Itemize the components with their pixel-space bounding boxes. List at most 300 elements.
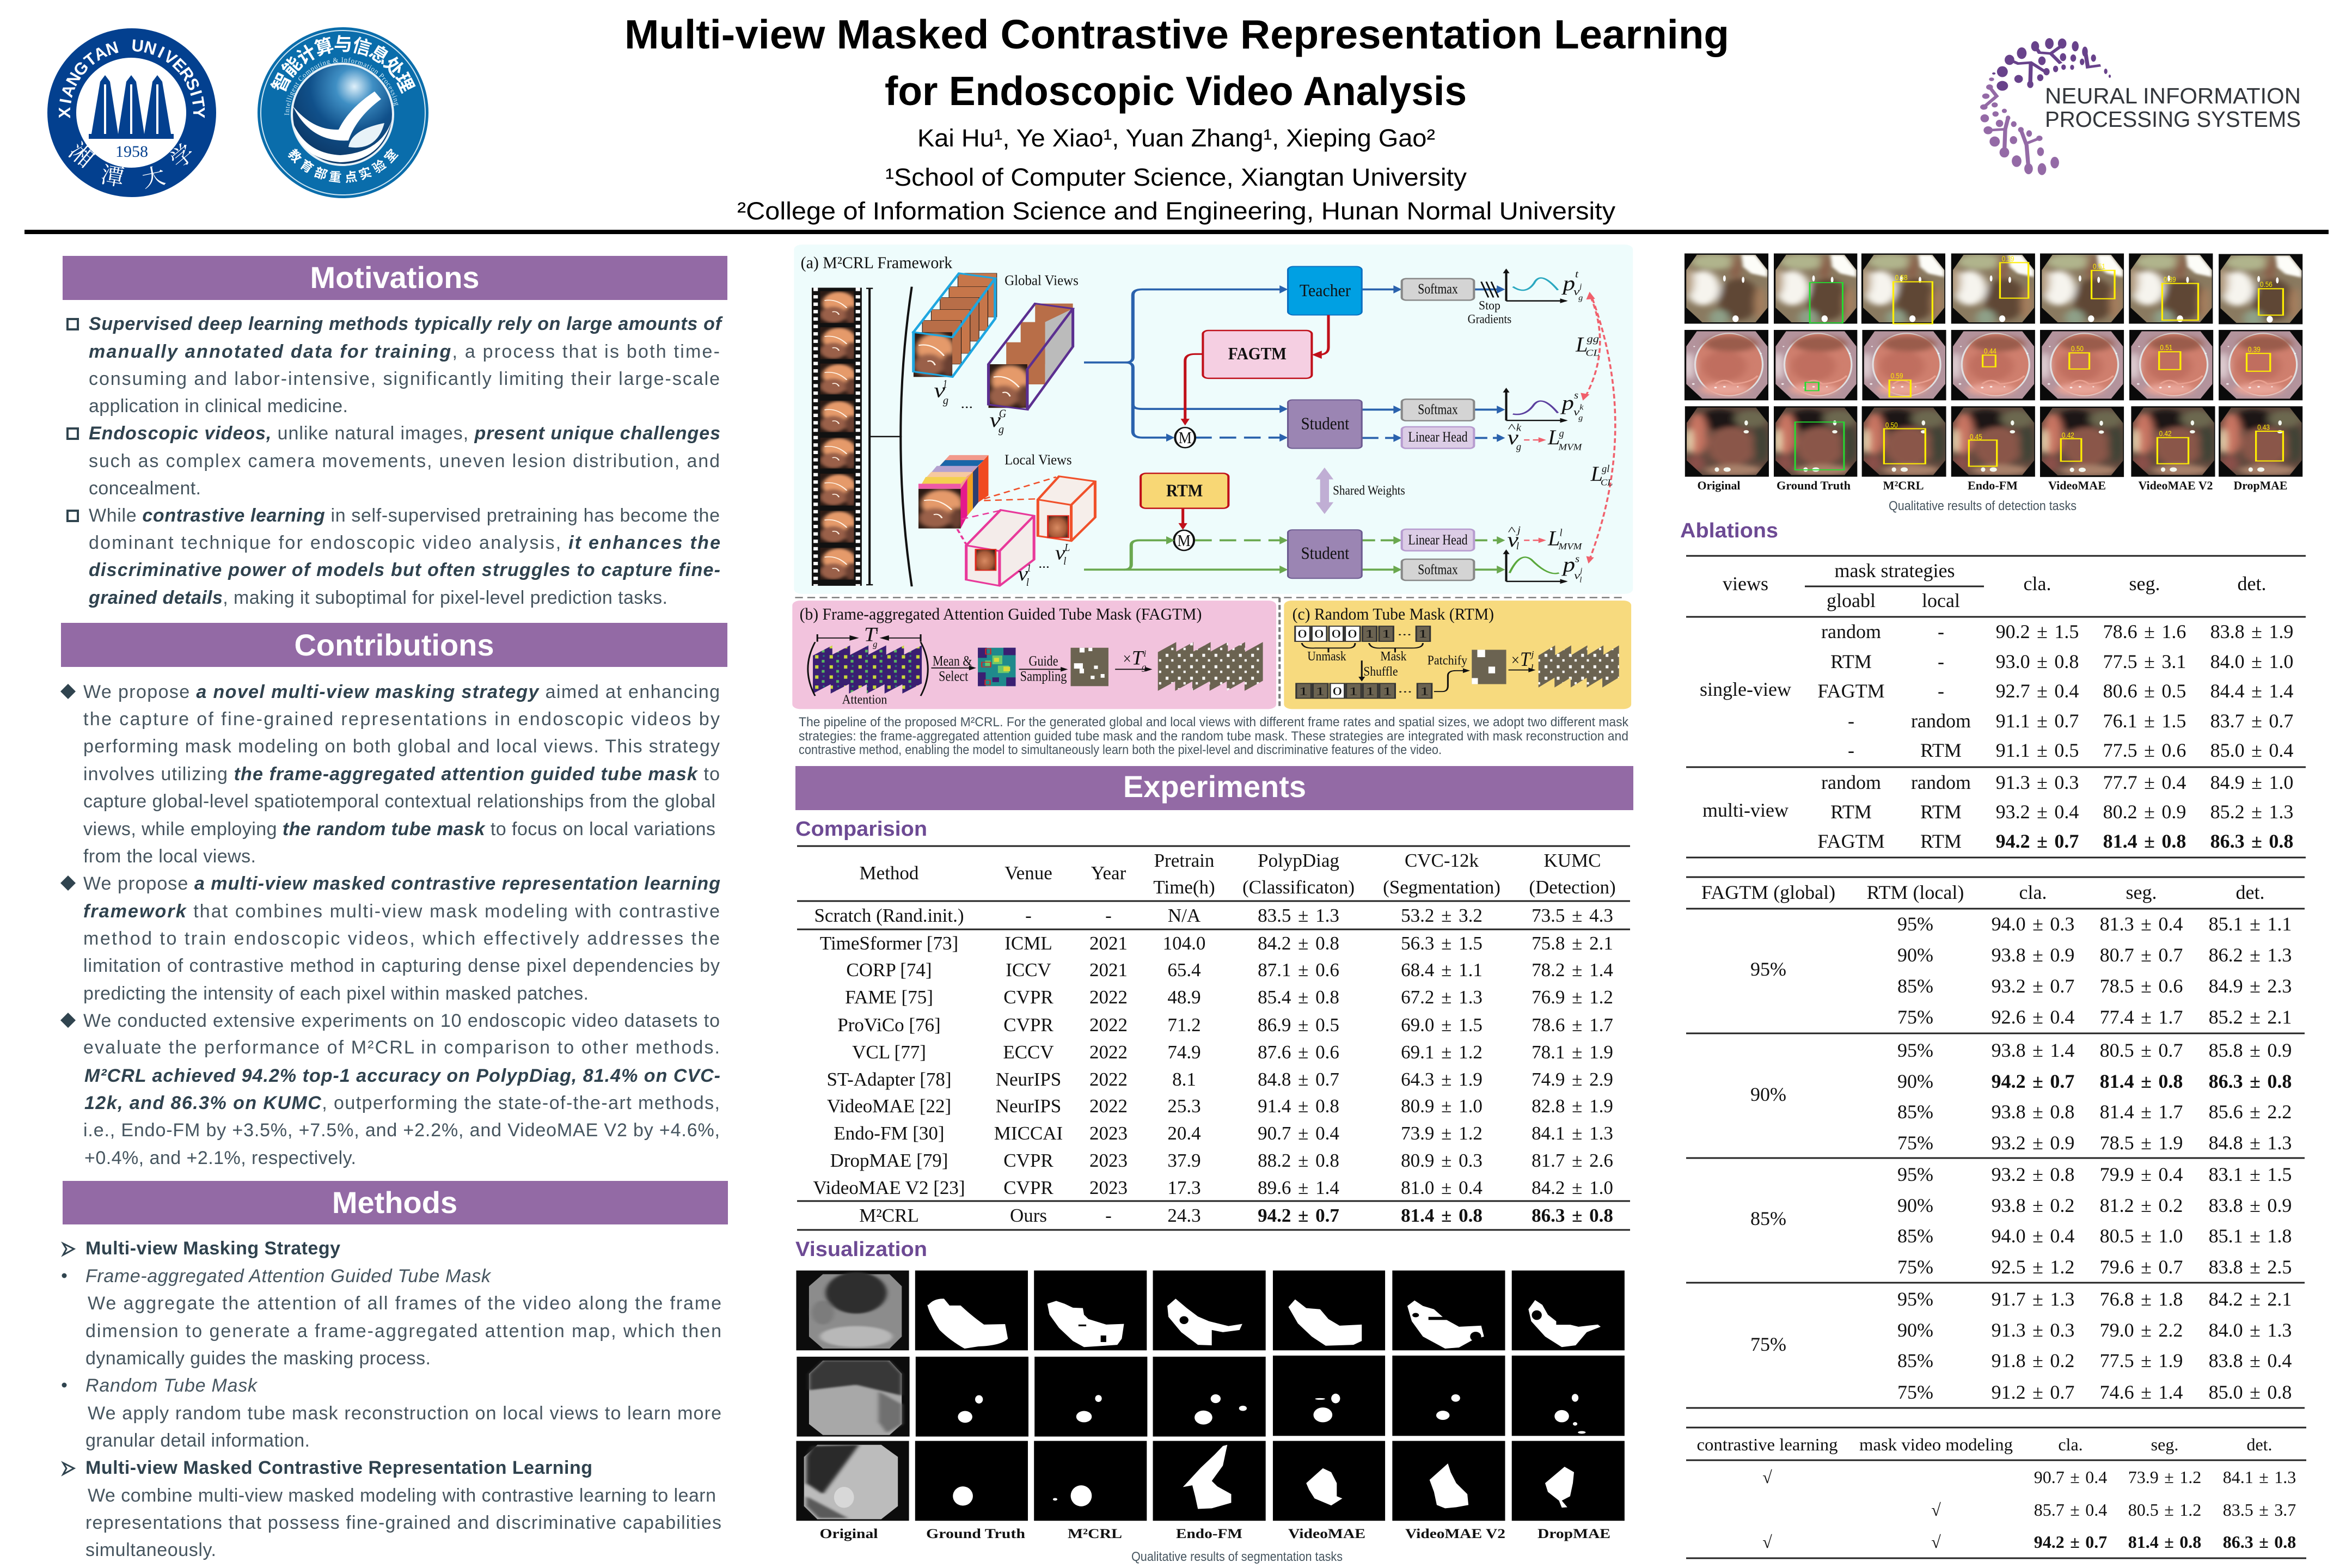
linear head: local student <box>1402 529 1474 551</box>
contributions text: capture global-level spatiotemporal contextual relationships from the global <box>83 791 715 812</box>
methods text: dynamically guides the masking process. <box>85 1348 431 1369</box>
table 1 header: views <box>1723 573 1768 595</box>
shuffled token row: 1 <box>1349 685 1358 697</box>
shuffled token row <box>1296 683 1432 699</box>
local reconstruction loss: j <box>1516 524 1521 536</box>
guide sampling step: Sampling <box>1020 668 1067 684</box>
local reconstruction loss: L <box>1547 526 1560 550</box>
table 2 rows: 84.9 ± 2.3 <box>2209 975 2292 997</box>
logo: key laboratory: 重 <box>328 166 342 186</box>
table 2 rows: 79.6 ± 0.7 <box>2100 1256 2183 1278</box>
table 1 rows: 91.1 ± 0.7 <box>1996 710 2079 732</box>
global views labels: g <box>999 423 1004 436</box>
logo: key laboratory: 验 <box>368 154 389 177</box>
comparison table rows: 65.4 <box>1167 959 1201 981</box>
table 3 rows: 86.3 ± 0.8 <box>2223 1532 2296 1552</box>
softmax block: local student: Softmax <box>1418 561 1458 577</box>
global student output plot: v <box>1573 407 1580 418</box>
predicted boxes <box>1884 262 2283 466</box>
white lesion masks row 1 <box>927 1298 1601 1349</box>
table 1 rows: multi-view <box>1702 799 1788 821</box>
comparison table rows: 2022 <box>1089 1095 1128 1117</box>
logo: key laboratory: 智 <box>264 68 296 96</box>
comparison table rows: ICCV <box>1006 959 1051 981</box>
table 3 rows: 85.7 ± 0.4 <box>2034 1500 2107 1520</box>
comparison table rows: N/A <box>1168 905 1201 926</box>
shuffled token row: 1 <box>1365 685 1375 697</box>
global reconstruction loss: g <box>1516 441 1521 452</box>
comparison table rows: 2023 <box>1089 1123 1128 1144</box>
table 1 rows: 93.0 ± 0.8 <box>1996 651 2079 672</box>
logo: Xiangtan University: E <box>169 54 190 76</box>
contributions text: evaluate the performance of M²CRL in comparison to other methods. <box>83 1037 720 1058</box>
panel: M2CRL framework diagram <box>792 244 1633 709</box>
logo: Xiangtan University: I <box>186 88 206 98</box>
logo: Xiangtan University: I <box>155 42 168 62</box>
heading: Experiments <box>795 766 1633 810</box>
unshuffled token row: 1 <box>1418 628 1428 640</box>
table 2 rows: 85.1 ± 1.1 <box>2209 913 2292 935</box>
teacher output plot: v <box>1573 286 1580 297</box>
table 2 rows: 94.2 ± 0.7 <box>1992 1070 2074 1092</box>
logo: key laboratory: 室 <box>379 144 401 166</box>
global views labels: G <box>999 407 1006 420</box>
table 2 rows: 79.9 ± 0.4 <box>2100 1163 2183 1185</box>
attention frames: g <box>873 639 878 650</box>
subheading: Ablations: Ablations <box>1680 519 1778 542</box>
endoscopy images row 3 <box>1685 406 2302 477</box>
global views labels: Global Views <box>1004 272 1079 288</box>
table 1 rows: random <box>1911 771 1971 793</box>
confidence scores: 0.59 <box>1891 372 1903 381</box>
table 3 rows: √ <box>1931 1532 1941 1552</box>
table 2 rows: 77.5 ± 1.9 <box>2100 1350 2183 1371</box>
table 3 rows: √ <box>1762 1467 1772 1487</box>
figure caption: contrastive method, enabling the model to simultaneously learn both the pixel-level and discriminative features of the video. <box>799 743 1442 757</box>
contributions text: framework that combines multi-view mask modeling with contrastive <box>83 901 720 922</box>
teacher block <box>1288 266 1362 315</box>
table 2 rows: 92.6 ± 0.4 <box>1992 1006 2074 1028</box>
table 1 rows: FAGTM <box>1817 680 1885 702</box>
global views labels: ... <box>960 396 973 411</box>
logo: key laboratory: 与 <box>334 29 352 56</box>
confidence scores: 0.39 <box>2164 275 2176 284</box>
logo: Xiangtan University: S <box>182 75 204 94</box>
table 3 header: det. <box>2246 1435 2273 1454</box>
table 3 rows: 80.5 ± 1.2 <box>2128 1500 2201 1520</box>
comparison table rows: 84.8 ± 0.7 <box>1258 1069 1339 1090</box>
table 2 rows: 86.3 ± 0.8 <box>2209 1070 2292 1092</box>
segmentation results grid <box>796 1271 1625 1521</box>
shuffled token row: 1 <box>1298 685 1308 697</box>
motivations text: While contrastive learning in self-supervised pretraining has become the <box>89 505 720 526</box>
table: contrastive learning and mask video modeling <box>1686 1428 2306 1558</box>
table 1 rows: - <box>1938 621 1944 642</box>
contributions text: 12k, and 86.3% on KUMC, outperforming the state-of-the-art methods, <box>84 1093 720 1113</box>
temporal repeat arrow local: j <box>1530 649 1534 659</box>
temporal repeat arrow local: T <box>1520 648 1532 670</box>
comparison table rows: 81.7 ± 2.6 <box>1532 1150 1613 1171</box>
green arrowheads <box>1166 536 1505 574</box>
panel: RTM <box>1284 601 1631 709</box>
table 2 rows: 81.4 ± 0.8 <box>2100 1070 2183 1092</box>
global student output plot: k <box>1579 403 1584 412</box>
contributions text: the capture of fine-grained representations in endoscopic videos by <box>83 709 720 730</box>
detection column labels <box>1698 479 2288 492</box>
global reconstruction loss: g <box>1559 428 1564 439</box>
RTM block: RTM <box>1166 481 1203 500</box>
comparison table header: (Classificaton) <box>1242 877 1355 898</box>
table 2 rows: 93.2 ± 0.9 <box>1992 1132 2074 1154</box>
table 2 rows: 75% <box>1750 1333 1786 1355</box>
table: mask ratio <box>1686 877 2305 1408</box>
temporal repeat arrow: T <box>1132 647 1144 669</box>
table 1 rows: 85.2 ± 1.3 <box>2210 801 2293 823</box>
motivations text <box>88 314 724 608</box>
attention frames: i <box>875 626 878 636</box>
table 1 rows: 91.1 ± 0.5 <box>1996 739 2079 761</box>
motivations text: discriminative power of models but often struggles to capture fine- <box>89 560 720 580</box>
methods text: We apply random tube mask reconstruction on local views to learn more <box>88 1403 721 1424</box>
comparison table header: KUMC <box>1543 850 1601 871</box>
table 2 header: RTM (local) <box>1867 881 1964 903</box>
table 2 rows: 91.3 ± 0.3 <box>1992 1319 2074 1341</box>
comparison table rows: NeurIPS <box>996 1095 1061 1117</box>
comparison table header: Time(h) <box>1153 877 1215 898</box>
logo: key laboratory <box>258 27 428 198</box>
table 2 rows: 80.5 ± 0.7 <box>2100 1039 2183 1061</box>
table 2 rows: 81.2 ± 0.2 <box>2100 1195 2183 1216</box>
shuffle arrow: Shuffle <box>1363 664 1398 679</box>
figure caption <box>799 715 1629 757</box>
contrastive loss labels: gl <box>1602 463 1609 474</box>
black mask tiles <box>915 1271 1625 1521</box>
table 1 rows <box>1700 621 2293 852</box>
teacher output plot: j <box>1578 282 1582 291</box>
global reconstruction loss: MVM <box>1558 442 1582 452</box>
comparison table rows: 73.5 ± 4.3 <box>1532 905 1613 926</box>
table 2 rows: 91.7 ± 1.3 <box>1992 1288 2074 1310</box>
table 2 rows: 84.8 ± 1.3 <box>2209 1132 2292 1154</box>
ground truth boxes <box>1795 283 1844 470</box>
comparison table rows: 85.4 ± 0.8 <box>1258 987 1339 1008</box>
comparison table rows: 84.2 ± 0.8 <box>1258 933 1339 954</box>
segmentation column labels: VideoMAE V2 <box>1405 1527 1505 1541</box>
local views labels: ... <box>1038 556 1050 571</box>
motivations text: manually annotated data for training, a process that is both time- <box>89 341 720 362</box>
logo: key laboratory: 信 <box>350 30 375 61</box>
comparison table rows: DropMAE [79] <box>830 1150 948 1171</box>
table 1 header <box>1723 560 2266 611</box>
table 2 rows: 84.0 ± 1.3 <box>2209 1319 2292 1341</box>
comparison table rows: 2022 <box>1089 1069 1128 1090</box>
table 2 header: FAGTM (global) <box>1701 881 1835 903</box>
logo: Xiangtan University: X <box>55 107 74 118</box>
detection column labels: Original <box>1698 479 1740 492</box>
comparison table rows: 80.9 ± 1.0 <box>1401 1095 1483 1117</box>
table 1 rows: 85.0 ± 0.4 <box>2210 739 2293 761</box>
motivations text: dominant technique for endoscopic video analysis, it enhances the <box>89 532 720 553</box>
comparison table rows: 90.7 ± 0.4 <box>1258 1123 1339 1144</box>
table 2 rows: 84.2 ± 2.1 <box>2209 1288 2292 1310</box>
methods text: Multi-view Masking Strategy <box>85 1238 340 1259</box>
table 1 rows: 86.3 ± 0.8 <box>2210 830 2293 852</box>
video film strip <box>812 287 912 586</box>
contrastive loss labels: CL <box>1585 348 1600 358</box>
methods text: simultaneously. <box>85 1540 216 1560</box>
table 2 rows: 95% <box>1897 1288 1933 1310</box>
aggregated attention heatmap <box>978 648 1016 686</box>
comparison table rows: Ours <box>1010 1205 1047 1226</box>
table 1 rows: random <box>1821 621 1881 642</box>
table 2 rows: 95% <box>1897 1163 1933 1185</box>
logo: key laboratory: 处 <box>379 50 411 82</box>
comparison table rows: 2022 <box>1089 1014 1128 1036</box>
local views labels <box>1004 452 1072 588</box>
softmax block: teacher: Softmax <box>1418 281 1458 297</box>
table 2 rows: 85% <box>1897 975 1933 997</box>
table 1 header: det. <box>2238 573 2266 595</box>
logo: Xiangtan University: I <box>56 97 75 105</box>
global view cuboids <box>914 273 1073 409</box>
table 3 rows: 73.9 ± 1.2 <box>2128 1467 2201 1487</box>
heading: Motivations <box>63 256 727 300</box>
comparison table rows: 53.2 ± 3.2 <box>1401 905 1483 926</box>
comparison table rows: 69.0 ± 1.5 <box>1401 1014 1483 1036</box>
comparison table rows: 74.9 ± 2.9 <box>1532 1069 1613 1090</box>
segmentation column labels: DropMAE <box>1538 1527 1610 1541</box>
FAGTM block <box>1203 330 1312 378</box>
local views labels: l <box>1063 555 1066 567</box>
student block: global <box>1288 400 1362 449</box>
contributions text: predicting the intensity of each pixel within masked patches. <box>83 983 589 1004</box>
logo: Xiangtan University: R <box>175 64 198 84</box>
comparison table rows: VideoMAE V2 [23] <box>813 1177 965 1198</box>
subheading: Visualization: Visualization <box>795 1238 927 1261</box>
table 2 rows: 85.0 ± 0.8 <box>2209 1381 2292 1403</box>
table 3 rows: 83.5 ± 3.7 <box>2223 1500 2296 1520</box>
local views labels: Local Views <box>1004 452 1072 468</box>
table 1 rows: 93.2 ± 0.4 <box>1996 801 2079 823</box>
local view stack <box>918 455 1056 544</box>
comparison table rows: 71.2 <box>1167 1014 1201 1036</box>
heading: Methods: Methods <box>332 1185 457 1220</box>
unshuffled token row: 0 <box>1347 628 1357 640</box>
table 3 rows: 94.2 ± 0.7 <box>2034 1532 2107 1552</box>
table 1 rows: - <box>1938 651 1944 672</box>
holes in masks <box>1079 1310 1570 1342</box>
comparison table header: Method <box>860 862 919 884</box>
local views labels: v <box>1055 542 1065 564</box>
logo: NeurIPS <box>1980 38 2301 175</box>
table 2 rows: 81.3 ± 0.4 <box>2100 913 2183 935</box>
table 3 rows: 90.7 ± 0.4 <box>2034 1467 2107 1487</box>
contrastive loss labels: L <box>1590 462 1603 486</box>
comparison table rows: 94.2 ± 0.7 <box>1258 1205 1339 1226</box>
table 1 rows: 80.2 ± 0.9 <box>2103 801 2186 823</box>
segmentation column labels: Ground Truth <box>926 1527 1025 1541</box>
masked local tube frames <box>1539 645 1619 688</box>
table 2 rows: 85% <box>1897 1225 1933 1247</box>
comparison table rows: CVPR <box>1003 1014 1054 1036</box>
table 2 rows: 77.4 ± 1.7 <box>2100 1006 2183 1028</box>
comparison table header: PolypDiag <box>1258 850 1339 871</box>
methods text: Frame-aggregated Attention Guided Tube Mask <box>85 1266 492 1287</box>
table 2 rows: 85.2 ± 2.1 <box>2209 1006 2292 1028</box>
global views labels: v <box>934 379 946 402</box>
table 2 rows: 94.0 ± 0.4 <box>1992 1225 2074 1247</box>
table 2 rows: 76.8 ± 1.8 <box>2100 1288 2183 1310</box>
table: method comparison <box>797 846 1630 1230</box>
table 2 rows: 93.8 ± 0.2 <box>1992 1195 2074 1216</box>
contributions text: views, while employing the random tube mask to focus on local variations <box>83 819 715 840</box>
comparison table rows: 75.8 ± 2.1 <box>1532 933 1613 954</box>
comparison table rows: 91.4 ± 0.8 <box>1258 1095 1339 1117</box>
comparison table rows: 74.9 <box>1167 1042 1201 1063</box>
table 2 rows: 85.1 ± 1.8 <box>2209 1225 2292 1247</box>
comparison table rows: 24.3 <box>1167 1205 1201 1226</box>
table 1 rows: 81.4 ± 0.8 <box>2103 830 2186 852</box>
local student output plot: p <box>1561 553 1575 576</box>
comparison table rows: 87.1 ± 0.6 <box>1258 959 1339 981</box>
heading: Methods <box>63 1181 728 1224</box>
comparison table rows: ST-Adapter [78] <box>826 1069 952 1090</box>
global student output plot: s <box>1574 390 1578 401</box>
table 3 header: cla. <box>2058 1435 2083 1454</box>
table 2 rows: 83.8 ± 0.4 <box>2209 1350 2292 1371</box>
table 1 rows: 84.4 ± 1.4 <box>2210 680 2293 702</box>
comparison table rows: 84.2 ± 1.0 <box>1532 1177 1613 1198</box>
table 1 rows: 84.9 ± 1.0 <box>2210 771 2293 793</box>
confidence scores: 0.42 <box>2159 430 2172 438</box>
logo: Xiangtan University: 湘 <box>63 134 101 174</box>
contributions text: We propose a novel multi-view masking strategy aimed at enhancing <box>83 682 720 702</box>
comparison table rows: 83.5 ± 1.3 <box>1258 905 1339 926</box>
logo: Xiangtan University: T <box>81 49 100 70</box>
logo: Xiangtan University: 1958 <box>115 143 148 161</box>
comparison table rows: VideoMAE [22] <box>827 1095 951 1117</box>
affiliations <box>737 163 1616 225</box>
title: Multi-view Masked Contrastive Representation Learning <box>624 11 1729 57</box>
heading: Motivations: Motivations <box>310 260 480 295</box>
contributions text: from the local views. <box>83 846 256 867</box>
blue arrowheads <box>1166 285 1505 442</box>
table 3 header <box>1696 1435 2273 1454</box>
comparison table rows: 68.4 ± 1.1 <box>1401 959 1483 981</box>
temporal repeat arrow local: × <box>1511 651 1520 669</box>
framework background <box>794 244 1633 594</box>
table 2 rows: 90% <box>1897 1319 1933 1341</box>
comparison table header <box>860 850 1616 898</box>
unmask and mask braces: Mask <box>1380 649 1406 664</box>
affiliations: ²College of Information Science and Engineering, Hunan Normal University <box>737 197 1616 225</box>
contrastive loss arrows <box>1585 297 1615 560</box>
unshuffled token row: 1 <box>1365 628 1374 640</box>
shuffled token row: 1 <box>1315 685 1325 697</box>
linear head: local student: Linear Head <box>1408 531 1468 548</box>
logo: Xiangtan University: Y <box>189 107 209 119</box>
motivations text: concealment. <box>89 478 201 499</box>
comparison table rows: 82.8 ± 1.9 <box>1532 1095 1613 1117</box>
table 2 rows: 79.0 ± 2.2 <box>2100 1319 2183 1341</box>
logo: Xiangtan University: 学 <box>162 135 200 175</box>
detection column labels: VideoMAE <box>2048 479 2106 492</box>
table 2 rows: 90% <box>1750 1083 1786 1105</box>
logo: key laboratory: Intelligent Computing & Information Processing <box>284 58 399 115</box>
panel: motivations <box>63 256 727 608</box>
stop gradients: Gradients <box>1468 311 1511 326</box>
shuffled token row: 1 <box>1420 685 1429 697</box>
linear head: global student: Linear Head <box>1408 429 1468 445</box>
table 1 rows: 91.3 ± 0.3 <box>1996 771 2079 793</box>
contributions text: We conducted extensive experiments on 10 endoscopic video datasets to <box>83 1010 720 1031</box>
local views labels: v <box>1018 562 1028 585</box>
heading: Contributions <box>61 623 727 667</box>
contributions text <box>83 682 720 1168</box>
comparison table rows: 81.0 ± 0.4 <box>1401 1177 1483 1198</box>
teacher output plot <box>1503 268 1583 303</box>
softmax block: teacher <box>1402 279 1474 300</box>
confidence scores: 0.44 <box>1984 347 1996 356</box>
contrastive loss labels: L <box>1575 332 1588 356</box>
comparison table rows: 73.9 ± 1.2 <box>1401 1123 1483 1144</box>
panel: FAGTM <box>792 601 1276 709</box>
temporal repeat arrow: × <box>1123 650 1131 667</box>
teacher block: Teacher <box>1300 281 1351 300</box>
unshuffled token row <box>1295 626 1430 641</box>
comparison table rows: 86.9 ± 0.5 <box>1258 1014 1339 1036</box>
comparison table header: Venue <box>1004 862 1052 884</box>
local reconstruction loss: MVM <box>1558 541 1582 552</box>
attention frames <box>808 623 928 707</box>
methods text: We combine multi-view masked modeling with contrastive learning to learn <box>88 1485 716 1506</box>
FAGTM block: FAGTM <box>1228 344 1287 364</box>
comparison table rows: 78.1 ± 1.9 <box>1532 1042 1613 1063</box>
shuffled token row: 0 <box>1333 685 1342 697</box>
confidence scores: 0.58 <box>1895 273 1908 282</box>
comparison table rows: 2022 <box>1089 1042 1128 1063</box>
table 3 header: contrastive learning <box>1696 1435 1838 1454</box>
comparison table rows: 8.1 <box>1172 1069 1196 1090</box>
table 1 header: local <box>1922 590 1960 611</box>
contrastive loss labels: CL <box>1601 477 1613 488</box>
contributions text: i.e., Endo-FM by +3.5%, +7.5%, and +2.2%, and VideoMAE V2 by +4.6%, <box>83 1120 720 1141</box>
confidence scores: 0.43 <box>2257 423 2270 432</box>
title <box>624 11 1729 114</box>
logo: NeurIPS: NEURAL INFORMATION <box>2045 83 2301 108</box>
contributions text: limitation of contrastive method in capturing dense pixel dependencies by <box>83 955 720 976</box>
segmentation caption: Qualitative results of segmentation tasks <box>1131 1549 1343 1564</box>
local views labels: L <box>1064 542 1070 554</box>
patchify arrow <box>1428 653 1470 691</box>
blue global flow arrows <box>1084 290 1498 438</box>
detection column labels: M²CRL <box>1883 479 1924 492</box>
contrastive loss labels: gg <box>1587 334 1599 345</box>
table 2 rows: 75% <box>1897 1256 1933 1278</box>
confidence scores <box>1885 255 2273 442</box>
FAGTM title: (b) Frame-aggregated Attention Guided Tube Mask (FAGTM) <box>800 605 1202 623</box>
motivations text: application in clinical medicine. <box>89 396 348 416</box>
table 2 rows: 93.2 ± 0.8 <box>1992 1163 2074 1185</box>
sampled mask <box>1071 648 1108 686</box>
table 1 rows: 92.7 ± 0.4 <box>1996 680 2079 702</box>
table 2 rows: 90% <box>1897 944 1933 966</box>
white lesion masks row 3 <box>953 1445 1574 1509</box>
local student output plot: s <box>1575 553 1579 565</box>
table 2 rows: 85% <box>1750 1208 1786 1229</box>
comparison table rows: 87.6 ± 0.6 <box>1258 1042 1339 1063</box>
table 2 rows: 81.4 ± 1.7 <box>2100 1101 2183 1123</box>
